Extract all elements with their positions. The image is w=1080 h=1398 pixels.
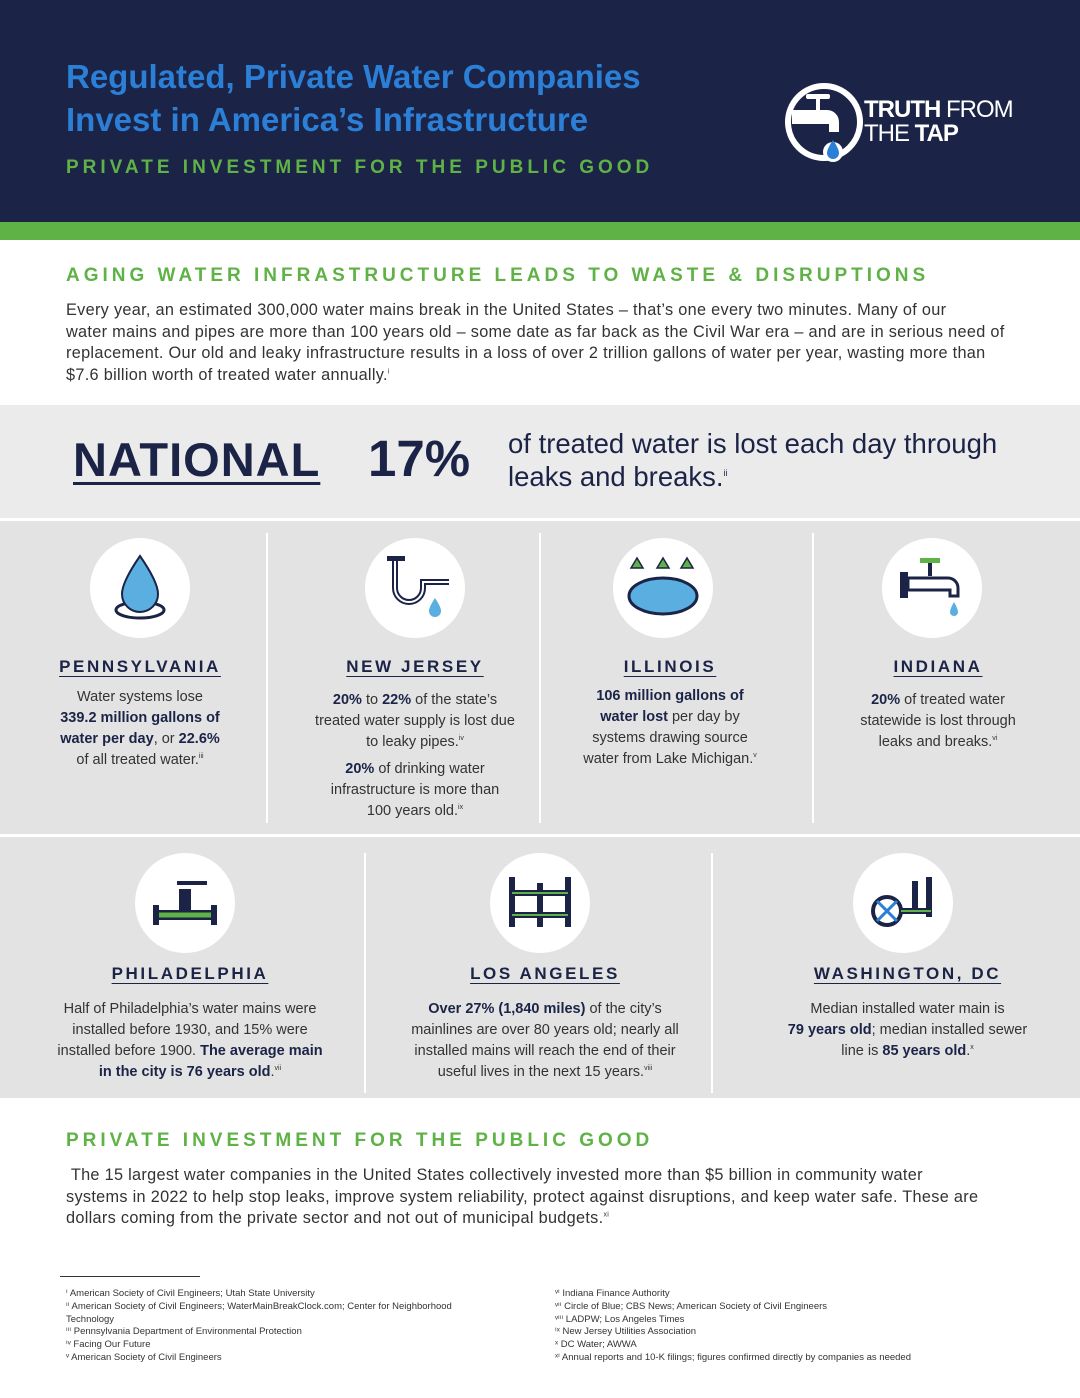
footnotes left: ⁱⁱⁱ Pennsylvania Department of Environmental Protection: [66, 1326, 302, 1337]
state: indiana: INDIANA: [893, 657, 983, 676]
state: indiana: [860, 657, 1016, 750]
city: los angeles: LOS ANGELES: [470, 964, 620, 983]
city: los angeles: Over 27% (1,840 miles) of the city’s: [428, 1001, 662, 1017]
investment paragraph: [66, 1166, 978, 1227]
intro paragraph: [66, 301, 1005, 384]
state: new jersey: 100 years old.ix: [367, 803, 463, 819]
city: washington dc: line is 85 years old.x: [841, 1043, 974, 1059]
footnotes left: [66, 1288, 452, 1363]
state: new jersey: 20% of drinking water: [345, 761, 485, 777]
icon: lake: [613, 538, 713, 638]
city: philadelphia: [57, 964, 323, 1080]
section heading: private investment: PRIVATE INVESTMENT FOR THE PUBLIC GOOD: [66, 1130, 653, 1151]
state: new jersey: to leaky pipes.iv: [366, 734, 464, 750]
footnotes right: ᵛⁱ Indiana Finance Authority: [555, 1288, 670, 1299]
footnotes left: ⁱ American Society of Civil Engineers; Utah State University: [66, 1288, 315, 1299]
intro paragraph: replacement. Our old and leaky infrastructure results in a loss of over 2 trillion gallons of water per year, wasting more than: [66, 344, 986, 362]
city: los angeles: installed mains will reach the end of their: [414, 1043, 676, 1059]
state: new jersey: treated water supply is lost due: [315, 713, 515, 729]
state: indiana: 20% of treated water: [871, 692, 1005, 708]
state: pennsylvania: of all treated water.iii: [76, 752, 204, 768]
city: philadelphia: PHILADELPHIA: [112, 964, 268, 983]
state: illinois: water from Lake Michigan.v: [583, 751, 757, 767]
intro paragraph: $7.6 billion worth of treated water annually.i: [66, 366, 390, 384]
state: pennsylvania: [59, 657, 221, 768]
logo: [785, 83, 1013, 162]
state: new jersey: [315, 657, 515, 819]
city: philadelphia: in the city is 76 years old.vii: [99, 1064, 281, 1080]
city: los angeles: useful lives in the next 15 years.viii: [438, 1064, 652, 1080]
subtitle: PRIVATE INVESTMENT FOR THE PUBLIC GOOD: [66, 157, 653, 178]
state: illinois: [583, 657, 757, 767]
section heading: aging: AGING WATER INFRASTRUCTURE LEADS TO WASTE & DISRUPTIONS: [66, 265, 929, 286]
city: washington dc: WASHINGTON, DC: [814, 964, 1001, 983]
state: pennsylvania: water per day, or 22.6%: [60, 731, 220, 747]
footnotes right: [555, 1288, 911, 1363]
state: indiana: leaks and breaks.vi: [879, 734, 997, 750]
state: pennsylvania: 339.2 million gallons of: [60, 710, 220, 726]
icon: valve pipe: [135, 853, 235, 953]
title: Regulated, Private Water Companies: [66, 58, 641, 95]
title: Invest in America’s Infrastructure: [66, 101, 588, 138]
national text: [508, 428, 997, 492]
footnotes right: ˣⁱ Annual reports and 10-K filings; figures confirmed directly by companies as needed: [555, 1352, 911, 1363]
investment paragraph: The 15 largest water companies in the United States collectively invested more than $5 billion in community water: [71, 1166, 923, 1184]
city: los angeles: mainlines are over 80 years old; nearly all: [411, 1022, 679, 1038]
header: [0, 0, 1080, 222]
city: washington dc: Median installed water main is: [810, 1001, 1005, 1017]
city: washington dc: [788, 964, 1027, 1059]
footnotes left: ⁱⁱ American Society of Civil Engineers; WaterMainBreakClock.com; Center for Neighborhood Technology: [66, 1301, 452, 1325]
icon: pipe network: [490, 853, 590, 953]
icon: faucet: [882, 538, 982, 638]
state: pennsylvania: PENNSYLVANIA: [59, 657, 221, 676]
investment paragraph: dollars coming from the private sector and not out of municipal budgets.xi: [66, 1209, 609, 1227]
title: [66, 58, 641, 138]
state: illinois: water lost per day by: [600, 709, 740, 725]
national text: leaks and breaks.ii: [508, 461, 728, 492]
state: indiana: statewide is lost through: [860, 713, 1016, 729]
intro paragraph: Every year, an estimated 300,000 water mains break in the United States – that’s one every two minutes. Many of our: [66, 301, 946, 319]
city: los angeles: [411, 964, 679, 1080]
logo: TRUTH FROM: [864, 96, 1013, 123]
city: philadelphia: installed before 1930, and 15% were: [72, 1022, 308, 1038]
logo: THE TAP: [864, 120, 959, 147]
state: illinois: systems drawing source: [592, 730, 748, 746]
icon: wheel valve: [853, 853, 953, 953]
footnotes right: ˣ DC Water; AWWA: [555, 1339, 637, 1350]
green stripe: [0, 222, 1080, 240]
state: new jersey: NEW JERSEY: [346, 657, 484, 676]
footnotes right: ᵛⁱⁱ Circle of Blue; CBS News; American Society of Civil Engineers: [555, 1301, 827, 1312]
state: new jersey: 20% to 22% of the state’s: [333, 692, 497, 708]
state: new jersey: infrastructure is more than: [331, 782, 499, 798]
state: illinois: 106 million gallons of: [596, 688, 744, 704]
footnotes right: ᵛⁱⁱⁱ LADPW; Los Angeles Times: [555, 1314, 684, 1325]
17% stat: 17%: [368, 430, 470, 487]
national band: [0, 405, 1080, 518]
city: philadelphia: Half of Philadelphia’s water mains were: [64, 1001, 316, 1017]
footnotes left: ⁱᵛ Facing Our Future: [66, 1339, 150, 1350]
intro paragraph: water mains and pipes are more than 100 years old – some date as far back as the Civil War era – and are in serious need of: [66, 322, 1005, 340]
city: washington dc: 79 years old; median installed sewer: [788, 1022, 1027, 1038]
city: philadelphia: installed before 1900. The average main: [57, 1043, 323, 1059]
state: illinois: ILLINOIS: [624, 657, 716, 676]
national text: of treated water is lost each day through: [508, 428, 997, 459]
icon: water drop: [90, 538, 190, 638]
footnotes right: ⁱˣ New Jersey Utilities Association: [555, 1326, 696, 1337]
state: pennsylvania: Water systems lose: [77, 689, 203, 705]
footnotes left: ᵛ American Society of Civil Engineers: [66, 1352, 222, 1363]
investment paragraph: systems in 2022 to help stop leaks, improve system reliability, protect against disruptions, and keep water safe. These are: [66, 1188, 978, 1206]
gray panel: [0, 405, 1080, 1098]
national label: NATIONAL: [73, 433, 320, 486]
icon: pipes leak: [365, 538, 465, 638]
